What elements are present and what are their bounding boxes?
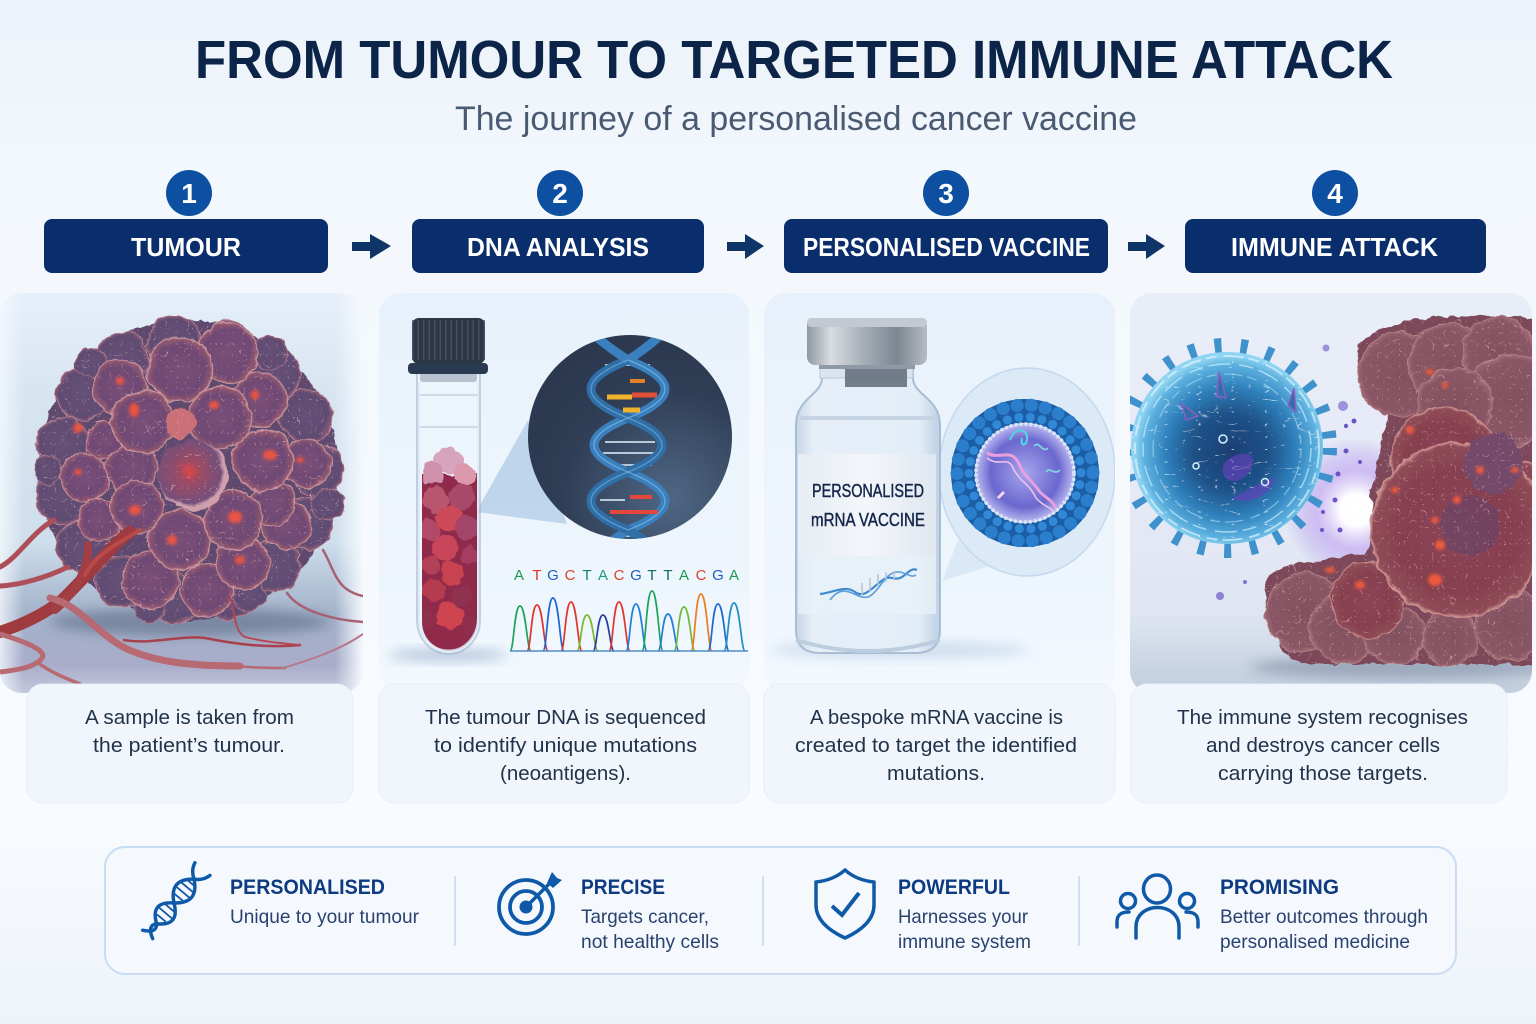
step header: 1 tumour: 1 — [181, 178, 197, 209]
powerful text: immune system — [898, 931, 1031, 953]
caption card: vaccine: created to target the identified — [795, 734, 1077, 757]
DNA sequence letters: G — [547, 567, 559, 584]
magnified DNA circle — [528, 335, 732, 539]
DNA sequence letters: C — [614, 567, 625, 584]
step header: 2 DNA analysis: DNA ANALYSIS — [467, 232, 649, 262]
personalised text: PERSONALISED — [230, 876, 385, 899]
blood vessels — [0, 520, 363, 684]
magnified lipid nanoparticle — [939, 368, 1115, 576]
chromatogram trace — [510, 591, 748, 651]
icon: target with arrow — [499, 872, 562, 934]
title: FROM TUMOUR TO TARGETED IMMUNE ATTACK — [195, 30, 1393, 90]
caption card: vaccine: A bespoke mRNA vaccine is — [810, 706, 1063, 729]
icon: DNA helix — [140, 863, 210, 941]
step header: 1 tumour: TUMOUR — [131, 232, 241, 262]
DNA sequence letters: A — [679, 567, 689, 584]
immune cell spikes — [1125, 346, 1329, 550]
DNA sequence letters: T — [647, 567, 657, 584]
tumour cell mass — [33, 315, 345, 624]
tumour shadow — [50, 608, 330, 636]
step header: 2 DNA analysis — [412, 170, 704, 273]
icon: shield with check — [816, 870, 874, 938]
attack flash — [1290, 442, 1381, 562]
DNA sequence letters: C — [696, 567, 707, 584]
step header: 3 personalised vaccine: 3 — [938, 178, 954, 209]
step header: 4 immune attack: 4 — [1327, 178, 1343, 209]
cancer cell mass — [1264, 315, 1536, 666]
precise text: PRECISE — [581, 876, 665, 899]
DNA sequence letters — [514, 570, 739, 580]
arrow: step 2 to 3 — [727, 234, 764, 259]
icon: group of people — [1117, 875, 1198, 938]
vial label: mRNA VACCINE — [811, 510, 925, 530]
step header: 3 personalised vaccine — [784, 170, 1108, 273]
personalised text: Unique to your tumour — [230, 906, 419, 928]
vial shadow — [770, 642, 1030, 658]
panel: tumour illustration — [0, 293, 363, 693]
vial label — [798, 454, 936, 556]
tumour red highlights — [73, 377, 304, 564]
caption card: DNA analysis: to identify unique mutations — [434, 734, 697, 757]
DNA sequence letters: A — [514, 567, 524, 584]
purple particles — [1216, 344, 1362, 600]
promising text: PROMISING — [1220, 876, 1339, 899]
DNA sequence letters: C — [565, 567, 576, 584]
DNA sequence letters: T — [582, 567, 592, 584]
powerful text: POWERFUL — [898, 876, 1010, 899]
vial label: PERSONALISED — [812, 481, 924, 501]
tube shadow — [388, 649, 508, 661]
precise text: Targets cancer, — [581, 906, 709, 928]
immune T cell — [1131, 352, 1323, 544]
caption card: DNA analysis — [379, 684, 749, 803]
benefits panel — [105, 847, 1456, 974]
caption card: immune attack: The immune system recognises — [1177, 706, 1468, 729]
personalised text — [230, 876, 419, 928]
step header: 4 immune attack: IMMUNE ATTACK — [1231, 232, 1438, 262]
precise text — [581, 876, 719, 953]
caption card: immune attack: carrying those targets. — [1218, 762, 1428, 785]
caption card: DNA analysis: The tumour DNA is sequenced — [425, 706, 706, 729]
panel: vaccine illustration — [764, 293, 1115, 693]
DNA sequence letters: G — [630, 567, 642, 584]
step header: 2 DNA analysis: 2 — [552, 178, 568, 209]
DNA sequence letters: T — [532, 567, 542, 584]
caption card: tumour — [27, 684, 353, 803]
DNA sequence letters: G — [712, 567, 724, 584]
panel: DNA analysis illustration — [379, 293, 749, 693]
caption card: immune attack: and destroys cancer cells — [1206, 734, 1440, 757]
powerful text: Harnesses your — [898, 906, 1028, 928]
caption card: immune attack — [1131, 684, 1507, 803]
vial mini DNA — [820, 569, 917, 600]
subtitle: The journey of a personalised cancer vaccine — [455, 100, 1137, 138]
caption card: vaccine — [764, 684, 1115, 803]
test tube with tumour sample — [408, 318, 488, 655]
step header: 3 personalised vaccine: PERSONALISED VACCINE — [803, 232, 1090, 262]
caption card: DNA analysis: (neoantigens). — [500, 762, 631, 785]
DNA sequence letters: T — [663, 567, 673, 584]
step header: 4 immune attack — [1185, 170, 1486, 273]
DNA sequence letters: A — [729, 567, 739, 584]
vaccine vial — [796, 318, 940, 653]
caption card: tumour: A sample is taken from — [85, 706, 294, 729]
arrow: step 1 to 2 — [352, 234, 391, 259]
promising text: Better outcomes through — [1220, 906, 1428, 928]
promising text: personalised medicine — [1220, 931, 1410, 953]
ground shadow — [1250, 655, 1536, 679]
caption card: tumour: the patient’s tumour. — [93, 734, 285, 757]
immune cell surface details — [1135, 356, 1319, 540]
promising text — [1220, 876, 1428, 953]
DNA sequence letters: A — [598, 567, 608, 584]
arrow: step 3 to 4 — [1128, 234, 1165, 259]
powerful text — [898, 876, 1031, 953]
panel: immune attack illustration — [1125, 293, 1536, 693]
magnifier cone — [476, 420, 567, 524]
step header: 1 tumour — [44, 170, 328, 273]
cancer cell red speckles — [1325, 369, 1519, 589]
nanoparticle callout tail — [942, 540, 990, 581]
caption card: vaccine: mutations. — [887, 762, 985, 785]
precise text: not healthy cells — [581, 931, 719, 953]
